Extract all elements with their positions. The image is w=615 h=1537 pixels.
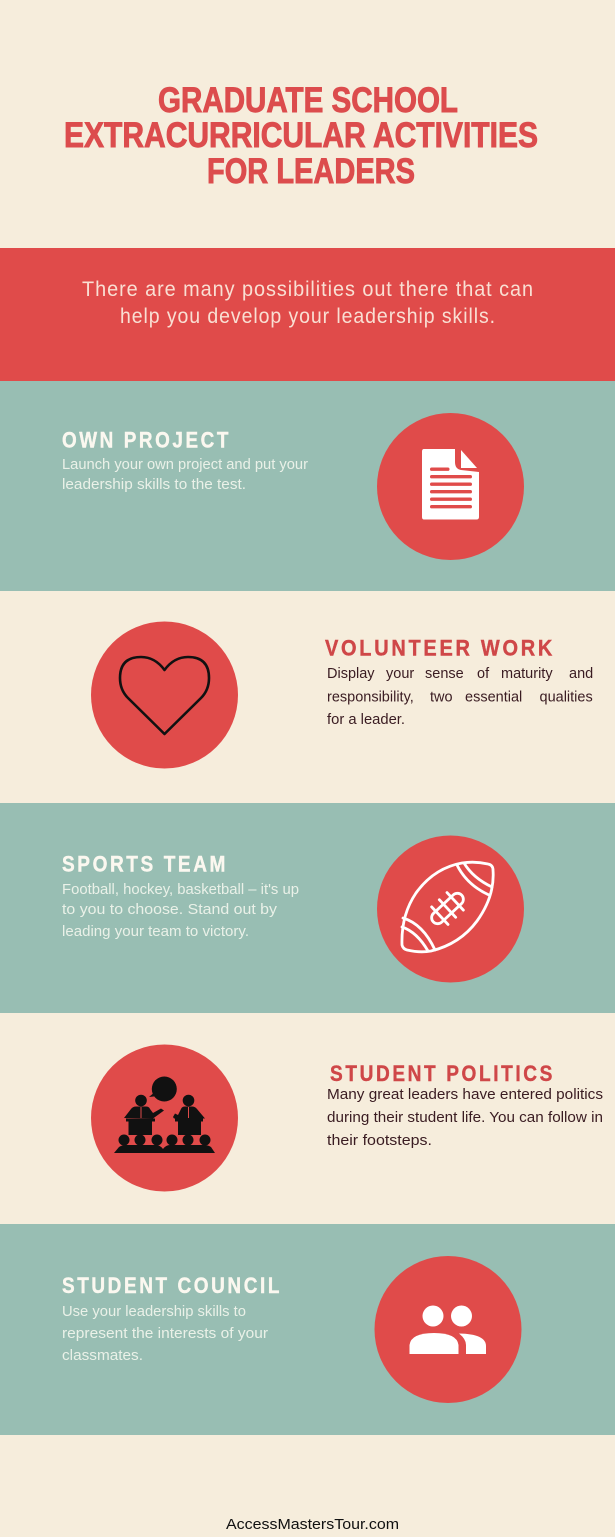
text: sports team: leading your team to victory.: [62, 924, 249, 940]
text: sports team: [62, 882, 299, 940]
text: student politics: during their student life. You can follow in: [327, 1110, 603, 1126]
panel: intro banner: There are many possibilities out there that can: [82, 278, 534, 301]
title: EXTRACURRICULAR ACTIVITIES: [64, 116, 538, 155]
text: volunteer work: maturity: [501, 666, 553, 682]
text: student politics: Many great leaders have entered politics: [327, 1087, 603, 1103]
text: volunteer work: [327, 666, 593, 728]
text: volunteer work: sense: [425, 666, 464, 682]
title: FOR LEADERS: [207, 152, 415, 191]
text: volunteer work: Display: [327, 666, 375, 682]
title: [64, 81, 538, 191]
text: student council: [62, 1304, 268, 1364]
text: student council: classmates.: [62, 1348, 143, 1364]
panel: sports team: [0, 803, 615, 1013]
text: volunteer work: two: [430, 690, 453, 706]
heading: student council: STUDENT COUNCIL: [62, 1273, 282, 1298]
text: volunteer work: for a leader.: [327, 712, 405, 728]
text: own project: Launch your own project and put your: [62, 457, 308, 473]
text: volunteer work: responsibility,: [327, 690, 414, 706]
icon: heart: [91, 622, 238, 768]
text: own project: leadership skills to the test.: [62, 477, 246, 493]
text: volunteer work: essential: [465, 690, 522, 706]
heading: student politics: STUDENT POLITICS: [330, 1061, 555, 1086]
text: student council: represent the interests of your: [62, 1326, 268, 1342]
panel: student politics: [91, 1044, 603, 1192]
icon: document: [377, 413, 524, 560]
text: sports team: Football, hockey, basketball – it's up: [62, 882, 299, 898]
text: volunteer work: and: [569, 666, 593, 682]
text: volunteer work: your: [386, 666, 414, 682]
text: student politics: their footsteps.: [327, 1133, 432, 1149]
heading: own project: OWN PROJECT: [62, 428, 231, 452]
panel: intro banner: help you develop your leadership skills.: [120, 305, 496, 328]
text: student council: Use your leadership skills to: [62, 1304, 246, 1320]
text: volunteer work: qualities: [540, 690, 593, 706]
icon: football: [377, 836, 524, 982]
heading: sports team: SPORTS TEAM: [62, 852, 228, 876]
panel: own project: [0, 381, 615, 591]
text: volunteer work: of: [477, 666, 490, 682]
panel: volunteer work: [91, 622, 593, 768]
icon: people: [374, 1256, 522, 1403]
panel: student council: [0, 1224, 615, 1435]
text: student politics: [327, 1087, 603, 1149]
text: own project: [62, 457, 308, 493]
title: GRADUATE SCHOOL: [158, 81, 458, 120]
footer: website: AccessMastersTour.com: [226, 1516, 399, 1533]
heading: volunteer work: VOLUNTEER WORK: [325, 636, 555, 660]
panel: intro banner: [0, 248, 615, 381]
icon: debate: [91, 1044, 238, 1192]
text: sports team: to you to choose. Stand out by: [62, 902, 278, 918]
